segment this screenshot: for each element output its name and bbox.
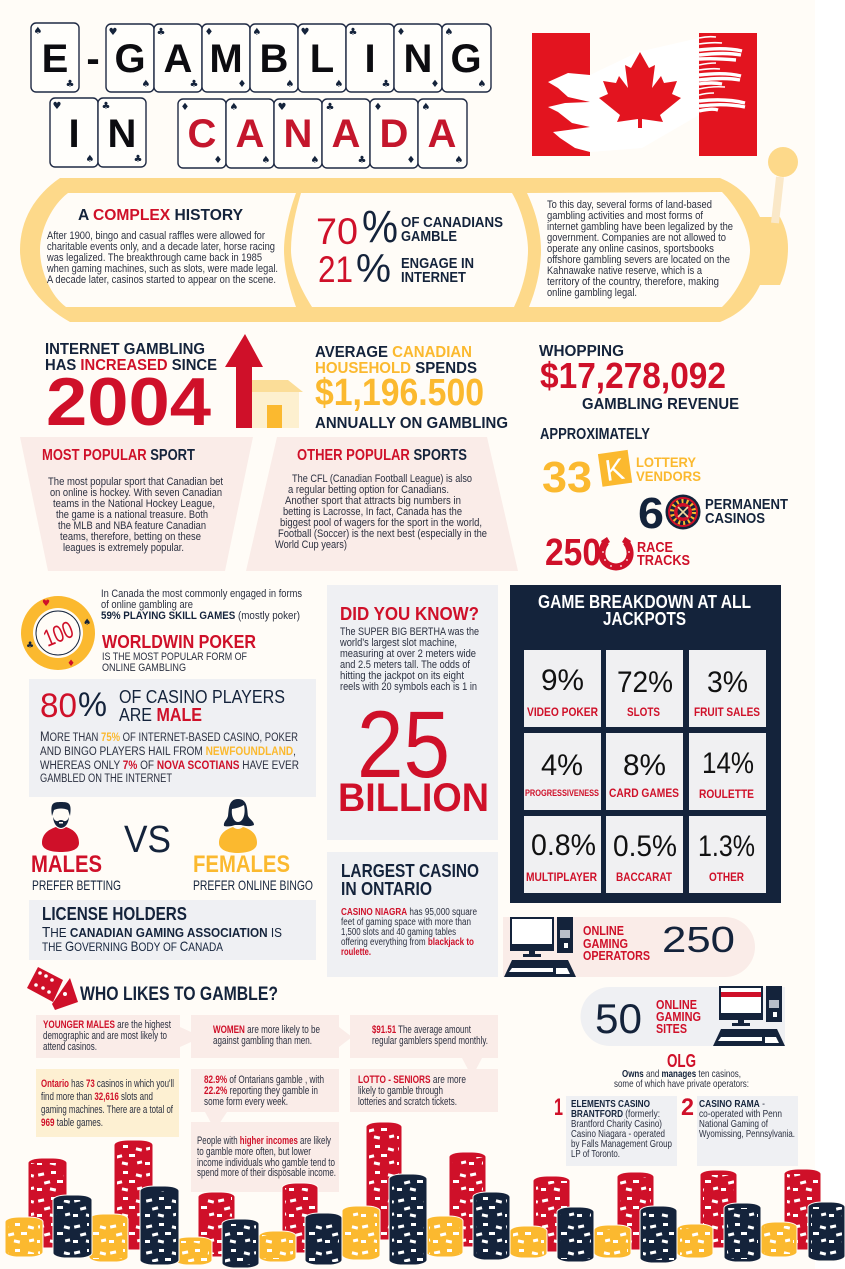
title line two cards: ♦	[181, 102, 189, 113]
cell: roulette	[689, 733, 766, 810]
VS: VS	[124, 819, 171, 861]
online gambling forms text: 59% PLAYING SKILL GAMES (mostly poker)	[101, 610, 300, 622]
cell: slots: 72%	[617, 666, 673, 699]
panel: legal status: internet gambling have been legalized by the	[547, 221, 733, 233]
panel: gambling percentages	[291, 193, 528, 307]
stat: race tracks	[545, 532, 690, 574]
title line one cards: ♦	[397, 27, 405, 38]
panel: other popular sports: biggest pool of wagers for the sport in the world,	[280, 517, 482, 529]
cell: progressiveness: PROGRESSIVENESS	[525, 788, 599, 798]
title line two cards: N	[108, 112, 136, 156]
cell: video poker: 9%	[541, 664, 584, 697]
panel: online gaming sites	[580, 986, 785, 1046]
internet gambling since 2004	[45, 341, 217, 440]
panel: gambling percentages: GAMBLE	[401, 228, 457, 245]
panel: Elements Casino Brantford: LP of Toronto.	[571, 1148, 620, 1160]
icon: roulette wheel	[666, 494, 700, 530]
panel: did you know: 25	[357, 692, 450, 798]
panel: gambling percentages: %	[356, 247, 391, 291]
title line two cards: ♦	[214, 155, 222, 166]
OLG intro: some of which have private operators:	[614, 1078, 749, 1090]
panel: 80 percent male: 80	[40, 687, 77, 725]
panel: license holders: THE CANADIAN GAMING ASSOCIATION IS	[42, 924, 282, 941]
cell: other: OTHER	[709, 872, 745, 884]
stat: permanent casinos: CASINOS	[705, 510, 765, 527]
title line two cards: C	[188, 112, 216, 156]
panel: other popular sports: OTHER POPULAR SPORTS	[297, 447, 467, 464]
online gambling forms text: IS THE MOST POPULAR FORM OF	[102, 651, 247, 663]
title line two cards: N	[284, 112, 312, 156]
panel: other popular sports: The CFL (Canadian Football League) is also	[292, 473, 472, 485]
stat: lottery vendors: LOTTERY	[636, 454, 697, 470]
males prefer betting	[31, 851, 121, 893]
panel: most popular sport: teams in the National Hockey League,	[53, 498, 215, 510]
title line one cards: ♣	[157, 27, 165, 38]
callout: lotto seniors	[350, 1069, 498, 1112]
callout: lotto seniors: likely to gamble through	[358, 1085, 443, 1097]
callout: higher incomes: income individuals who gamble tend to	[197, 1157, 335, 1169]
title line two cards: ♠	[262, 155, 270, 166]
panel: 80 percent male: OF CASINO PLAYERS	[119, 687, 285, 707]
title line two cards: I	[68, 112, 80, 156]
online gambling forms text: WORLDWIN POKER	[102, 632, 256, 652]
stat: lottery vendors	[542, 450, 701, 502]
callout: Ontarians gamble: 82.9% of Ontarians gamble , with	[204, 1074, 324, 1086]
callout: Ontario casinos: 969 table games.	[41, 1117, 103, 1129]
title line one cards: M	[209, 37, 243, 81]
title line one cards: A	[164, 37, 192, 81]
panel: Elements Casino Brantford: by Falls Management Group	[571, 1138, 672, 1150]
callout: younger males	[36, 1015, 180, 1058]
callout: younger males: attend casinos.	[43, 1041, 97, 1053]
panel: other popular sports	[246, 437, 518, 571]
stat: permanent casinos: 6	[638, 489, 664, 538]
title line two cards: ♥	[278, 102, 287, 113]
cell: progressiveness	[524, 733, 601, 810]
panel: largest casino in Ontario: LARGEST CASINO	[341, 861, 479, 881]
panel: Casino Rama: CASINO RAMA -	[699, 1098, 765, 1110]
panel: other popular sports: betting is Lacrosse, In fact, Canada has the	[283, 506, 462, 518]
panel: legal status: To this day, several forms of land-based	[547, 199, 712, 211]
panel: legal status: offshore gambling severs are located on the	[547, 254, 730, 266]
icon: slot machine lever	[758, 147, 798, 285]
callout: higher incomes: People with higher incomes are likely	[197, 1135, 331, 1147]
panel: most popular sport: teams, therefore, betting on these	[60, 531, 201, 543]
icon: poker chip 100: ♣	[26, 641, 34, 651]
callout: Ontario casinos	[36, 1069, 179, 1137]
cell: slots	[606, 650, 683, 727]
cell: baccarat: 0.5%	[613, 830, 677, 863]
panel: game breakdown at all jackpots: GAME BREAKDOWN AT ALL	[538, 592, 751, 612]
online gambling forms text	[101, 588, 302, 674]
panel: legal status	[527, 192, 750, 307]
cell: card games	[606, 733, 683, 810]
title line one cards: ♠	[335, 79, 343, 90]
callout: women	[191, 1015, 339, 1058]
cell: progressiveness: 4%	[541, 749, 583, 782]
title line two cards: ♣	[134, 154, 142, 165]
title line two cards: D	[380, 112, 408, 156]
panel: 80 percent male: GAMBLED ON THE INTERNET	[40, 773, 172, 785]
callout: average monthly spend: regular gamblers spend monthly.	[372, 1035, 488, 1047]
panel: online gaming operators: 250	[662, 919, 735, 960]
stat: lottery vendors: VENDORS	[636, 468, 701, 484]
icon: K tile	[598, 450, 632, 489]
household spending: $1,196.500	[315, 372, 484, 414]
icon: house with rising arrow	[225, 334, 303, 428]
title line two cards: ♣	[326, 102, 334, 113]
cell: baccarat: BACCARAT	[616, 872, 672, 884]
callout: Ontario casinos: gaming machines. There are a total of	[41, 1104, 174, 1116]
callout: Ontarians gamble: some form every week.	[204, 1096, 288, 1108]
title line one cards: -	[86, 37, 100, 81]
icon: horseshoe	[601, 537, 631, 567]
icon: K tile: K	[603, 453, 627, 488]
callout: younger males: demographic and are most likely to	[43, 1030, 167, 1042]
panel: legal status: online gambling legal.	[547, 287, 637, 299]
household spending	[315, 344, 508, 432]
icon: computer	[504, 917, 576, 977]
title line one cards: ♠	[478, 79, 486, 90]
panel: did you know: and 2.5 meters tall. The odds of	[340, 659, 471, 671]
revenue: GAMBLING REVENUE	[582, 396, 739, 413]
title line one cards: ♣	[190, 79, 198, 90]
title line two cards: ♠	[422, 102, 430, 113]
panel: Elements Casino Brantford: Brantford Charity Casino)	[571, 1118, 662, 1130]
title line two cards: ♠	[230, 102, 238, 113]
panel: gambling percentages: 70	[316, 211, 358, 252]
revenue: WHOPPING	[539, 343, 624, 360]
OLG intro: Owns and manages ten casinos,	[622, 1068, 741, 1080]
panel: license holders: LICENSE HOLDERS	[42, 904, 187, 924]
cell: multiplayer	[524, 816, 601, 893]
callout: Ontarians gamble: 22.2% reporting they gamble in	[204, 1085, 318, 1097]
callout: higher incomes: spend more of their disposable income.	[197, 1167, 336, 1179]
callout: women: WOMEN are more likely to be	[213, 1024, 320, 1036]
panel: gambling percentages: ENGAGE IN	[401, 255, 474, 272]
revenue: APPROXIMATELY	[540, 426, 650, 443]
panel: largest casino in Ontario: 1,500 slots and 40 gaming tables	[341, 927, 456, 938]
title line one cards: ♠	[286, 79, 294, 90]
panel: Elements Casino Brantford: ELEMENTS CASINO	[571, 1098, 650, 1110]
cell: multiplayer: 0.8%	[531, 829, 596, 862]
revenue	[539, 343, 739, 443]
OLG intro: OLG	[667, 1051, 696, 1071]
panel: gambling percentages: %	[362, 201, 398, 252]
internet gambling since 2004: 2004	[46, 364, 211, 440]
panel: game breakdown at all jackpots	[510, 585, 781, 903]
title line one cards: ♣	[382, 79, 390, 90]
stat: permanent casinos	[638, 489, 788, 538]
cell: multiplayer: MULTIPLAYER	[526, 872, 598, 884]
title line one cards: ♣	[349, 27, 357, 38]
panel: most popular sport: on online is hockey. With seven Canadian	[50, 487, 222, 499]
panel: 80 percent male	[29, 679, 316, 797]
icon: poker chip 100: 100	[40, 616, 78, 653]
callout: higher incomes	[191, 1122, 339, 1192]
arrows between callouts	[180, 1027, 482, 1130]
panel: did you know: world's largest slot machine,	[339, 637, 457, 649]
stat: race tracks: RACE	[637, 539, 673, 556]
panel: largest casino in Ontario: IN ONTARIO	[341, 879, 432, 899]
panel: most popular sport: the game is a national treasure. Both	[56, 509, 208, 521]
panel: did you know: DID YOU KNOW?	[340, 604, 479, 624]
cell: other	[689, 816, 766, 893]
panel: license holders: THE GOVERNING BODY OF CANADA	[42, 938, 223, 954]
females prefer online bingo: PREFER ONLINE BINGO	[193, 877, 313, 893]
panel: did you know: measuring at over 2 meters wide	[340, 648, 476, 660]
title line two cards: A	[332, 112, 360, 156]
title line two cards: A	[428, 112, 456, 156]
panel: a complex history: After 1900, bingo and casual raffles were allowed for	[47, 230, 265, 242]
panel: did you know: The SUPER BIG BERTHA was the	[340, 626, 479, 638]
title line one cards: ♠	[34, 26, 42, 37]
household spending: AVERAGE CANADIAN	[315, 344, 472, 361]
cell: fruit sales	[689, 650, 766, 727]
panel: game breakdown at all jackpots: JACKPOTS	[603, 609, 686, 629]
panel: 80 percent male: MORE THAN 75% OF INTERNET-BASED CASINO, POKER	[40, 728, 298, 744]
panel: online gaming operators	[503, 917, 755, 977]
title line one cards: L	[310, 37, 334, 81]
panel: a complex history: A COMPLEX HISTORY	[78, 207, 243, 224]
heading: who likes to gamble	[27, 967, 278, 1010]
panel: gambling percentages: 21	[318, 249, 353, 290]
stat: permanent casinos: PERMANENT	[705, 496, 788, 513]
cell: video poker	[524, 650, 601, 727]
internet gambling since 2004: INTERNET GAMBLING	[45, 341, 205, 358]
stat: race tracks: 250	[545, 532, 601, 574]
title line one cards: ♥	[301, 27, 310, 38]
title line two cards: ♠	[311, 155, 319, 166]
title line one cards: ♠	[253, 27, 261, 38]
panel: 80 percent male: WHEREAS ONLY 7% OF NOVA SCOTIANS HAVE EVER	[40, 760, 299, 772]
household spending: HOUSEHOLD SPENDS	[315, 360, 477, 377]
stat: race tracks: TRACKS	[637, 552, 690, 569]
stat: lottery vendors: 33	[542, 453, 592, 502]
callout: average monthly spend	[350, 1015, 498, 1058]
internet gambling since 2004: HAS INCREASED SINCE	[45, 357, 217, 374]
panel: Casino Rama: 2	[681, 1094, 694, 1121]
callout: average monthly spend: $91.51 The average amount	[372, 1024, 471, 1036]
cell: fruit sales: 3%	[707, 666, 748, 699]
title line one cards: ♦	[238, 79, 246, 90]
panel: legal status: Kahnawake native reserve, which is a	[547, 265, 703, 277]
title line two cards: ♣	[102, 101, 110, 112]
title line two cards: ♠	[455, 155, 463, 166]
panel: gambling percentages: OF CANADIANS	[401, 214, 503, 231]
panel: most popular sport	[20, 437, 253, 571]
panel: did you know	[327, 585, 498, 840]
icon: computer with site	[713, 986, 785, 1046]
panel: online gaming sites: 50	[595, 995, 642, 1042]
panel: a complex history: A decade later, casinos started to appear on the scene.	[47, 274, 276, 286]
panel: did you know: hitting the jackpot on its eight	[340, 670, 464, 682]
title line one cards	[31, 23, 491, 92]
title line one cards: E	[42, 37, 68, 81]
cell: roulette: ROULETTE	[699, 789, 754, 801]
title line one cards: ♦	[431, 79, 439, 90]
panel: Elements Casino Brantford	[554, 1094, 677, 1166]
panel: Casino Rama: Wyomissing, Pennsylvania.	[699, 1128, 795, 1140]
callout: Ontarians gamble	[191, 1069, 339, 1112]
panel: Elements Casino Brantford: BRANTFORD (formerly:	[571, 1108, 660, 1120]
panel: Casino Rama: co-operated with Penn	[699, 1108, 782, 1120]
panel: a complex history: charitable events only, and a decade later, horse racing	[47, 241, 275, 253]
title line two cards: A	[236, 112, 264, 156]
slot machine body	[20, 178, 760, 322]
cell: fruit sales: FRUIT SALES	[694, 707, 760, 719]
panel: did you know: reels with 20 symbols each is 1 in	[340, 681, 477, 693]
cell: video poker: VIDEO POKER	[527, 707, 599, 719]
title line one cards: N	[404, 37, 432, 81]
panel: most popular sport: leagues is extremely popular.	[63, 542, 184, 554]
panel: gambling percentages: INTERNET	[401, 269, 466, 286]
icon: poker chip 100	[21, 596, 95, 670]
panel: a complex history: when gaming machines, such as slots, were made legal.	[46, 263, 278, 275]
panel: largest casino in Ontario: roulette.	[341, 947, 371, 958]
panel: Elements Casino Brantford: 1	[554, 1094, 563, 1121]
icon: dice	[27, 967, 78, 1010]
panel: online gaming sites: GAMING	[656, 1009, 701, 1024]
females prefer online bingo: FEMALES	[193, 851, 290, 878]
callout: younger males: YOUNGER MALES are the highest	[43, 1019, 171, 1031]
cell: slots: SLOTS	[627, 707, 660, 719]
callout: Ontario casinos: find more than 32,616 slots and	[41, 1091, 153, 1103]
panel: most popular sport: MOST POPULAR SPORT	[42, 447, 195, 464]
panel: 80 percent male: AND BINGO PLAYERS HAIL FROM NEWFOUNDLAND,	[40, 746, 296, 758]
panel: other popular sports: World Cup years)	[275, 539, 347, 551]
panel: online gaming operators: OPERATORS	[583, 948, 650, 963]
panel: most popular sport: The most popular sport that Canadian bet	[48, 476, 223, 488]
callout: lotto seniors: LOTTO - SENIORS are more	[358, 1074, 466, 1086]
revenue: $17,278,092	[540, 355, 726, 396]
title: E-Gambling in Canada	[31, 23, 491, 168]
panel: largest casino in Ontario: CASINO NIAGRA has 95,000 square	[341, 907, 477, 918]
cell: card games: CARD GAMES	[609, 788, 679, 800]
icon: female person	[219, 799, 257, 853]
panel: 80 percent male: %	[78, 686, 107, 724]
panel: Elements Casino Brantford: Casino Niagara - operated	[571, 1128, 665, 1140]
online gambling forms text: In Canada the most commonly engaged in forms	[101, 588, 302, 600]
poker chip stacks	[5, 1122, 845, 1268]
panel: online gaming operators: ONLINE	[583, 923, 624, 938]
icon: poker chip 100: ♦	[67, 659, 75, 669]
title line one cards: G	[450, 37, 482, 81]
panel: license holders	[29, 900, 316, 960]
panel: did you know: BILLION	[338, 776, 489, 820]
females prefer online bingo	[193, 851, 313, 893]
title line one cards: ♠	[142, 79, 150, 90]
males prefer betting: MALES	[31, 851, 102, 878]
title line two cards: ♥	[53, 101, 62, 112]
panel: other popular sports: a regular betting option for Canadians.	[288, 484, 449, 496]
cell: roulette: 14%	[702, 747, 754, 780]
males prefer betting: PREFER BETTING	[32, 877, 121, 893]
panel: most popular sport: the MLB and NBA feature Canadian	[58, 520, 206, 532]
callout: women: against gambling than men.	[213, 1035, 312, 1047]
panel: online gaming operators: GAMING	[583, 936, 628, 951]
cell: baccarat	[606, 816, 683, 893]
panel: largest casino in Ontario: feet of gaming space with more than	[341, 917, 471, 928]
panel: largest casino in Ontario: offering everything from blackjack to	[341, 937, 474, 948]
callout: Ontario casinos: Ontario has 73 casinos in which you'll	[41, 1078, 174, 1090]
icon: poker chip 100: ♥	[42, 599, 50, 609]
cell: card games: 8%	[623, 749, 666, 782]
panel: other popular sports: Football (Soccer) is the next best (especially in the	[278, 528, 487, 540]
panel: legal status: operate any online casinos, sportsbooks	[547, 243, 714, 255]
title line one cards: B	[260, 37, 288, 81]
title line one cards: ♦	[205, 27, 213, 38]
panel: legal status: gambling activities and most forms of	[547, 210, 704, 222]
panel: online gaming sites: ONLINE	[656, 997, 697, 1012]
callout: lotto seniors: lotteries and scratch tickets.	[358, 1096, 457, 1108]
title line one cards: I	[364, 37, 376, 81]
panel: Casino Rama: National Gaming of	[699, 1118, 768, 1130]
title line two cards	[50, 98, 467, 168]
title line two cards: ♠	[86, 154, 94, 165]
panel: online gaming sites: SITES	[656, 1021, 687, 1036]
online gambling forms text: ONLINE GAMBLING	[102, 662, 186, 674]
panel: a complex history	[40, 193, 296, 307]
title line two cards: ♦	[374, 102, 382, 113]
icon: Canadian flag	[532, 33, 757, 156]
panel: 80 percent male: ARE MALE	[119, 705, 202, 725]
panel: Casino Rama	[681, 1094, 798, 1166]
title line one cards: ♣	[66, 79, 74, 90]
heading: who likes to gamble: WHO LIKES TO GAMBLE?	[80, 984, 278, 1005]
household spending: ANNUALLY ON GAMBLING	[315, 415, 508, 432]
title line one cards: ♠	[445, 27, 453, 38]
icon: male person	[42, 802, 79, 852]
online gambling forms text: of online gambling are	[101, 599, 193, 611]
panel: legal status: government. Companies are not allowed to	[547, 232, 726, 244]
title line one cards: G	[114, 37, 146, 81]
panel: slot machine history	[20, 147, 798, 322]
cell: other: 1.3%	[698, 830, 755, 863]
title line one cards: ♥	[109, 27, 118, 38]
panel: largest casino in Ontario	[327, 852, 498, 977]
title line two cards: ♣	[358, 155, 366, 166]
icon: poker chip 100: ♠	[83, 618, 91, 628]
OLG intro	[614, 1051, 749, 1090]
callout: higher incomes: to gamble more often, but lower	[197, 1146, 311, 1158]
title line two cards: ♦	[407, 155, 415, 166]
panel: a complex history: was legalized. The breakthrough came back in 1985	[46, 252, 262, 264]
panel: other popular sports: Another sport that attracts big numbers in	[285, 495, 461, 507]
panel: legal status: territory of the country, therefore, making	[547, 276, 719, 288]
